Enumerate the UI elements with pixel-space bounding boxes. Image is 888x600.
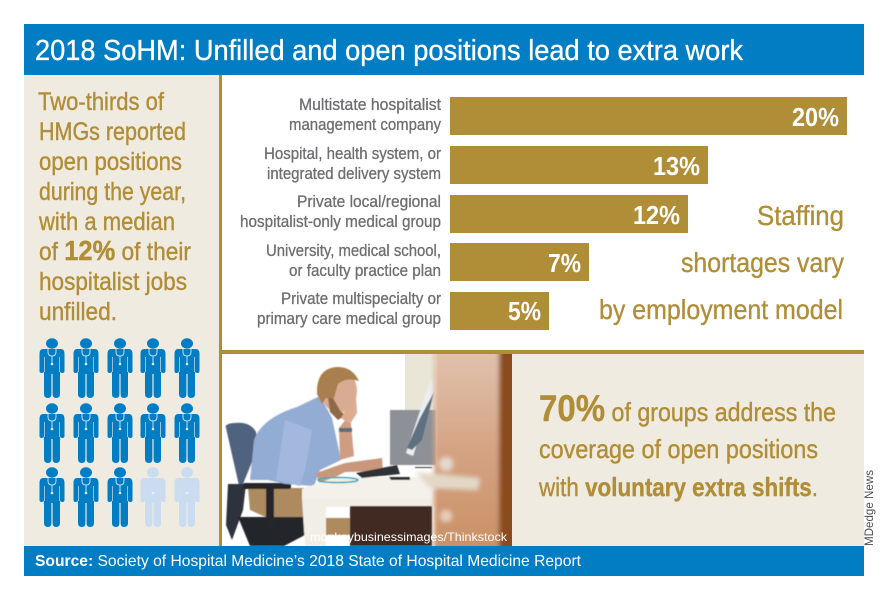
bar values: 13% [653,151,700,181]
chart caption [599,200,844,325]
shirt [250,396,341,486]
bar values: 12% [633,200,680,230]
trousers [248,488,306,522]
sidebar text: unfilled. [39,298,117,326]
chart caption: shortages vary [681,247,844,278]
category labels [240,96,442,328]
sidebar text: with a median [38,208,175,236]
monitor back [390,410,436,465]
desk [302,477,436,500]
gold vertical divider [219,75,222,546]
chair seat and arm [238,517,305,546]
sidebar text [38,88,191,326]
sidebar text: of 12% of their [39,235,191,266]
callout text: 70% of groups address the [539,388,836,429]
sidebar text: hospitalist jobs [39,268,187,296]
chair back [226,423,258,490]
panel: left sidebar [24,75,219,546]
category labels: primary care medical group [257,310,441,328]
sidebar text: open positions [39,148,182,176]
chart caption: by employment model [599,294,843,325]
panel: callout [512,354,864,546]
category labels: hospitalist-only medical group [240,213,441,231]
door [415,354,506,546]
footer source bar [24,546,864,576]
category labels: Multistate hospitalist [299,96,441,114]
side credit: MDedge News [862,470,876,546]
forearm on keyboard [316,458,383,485]
category labels: Hospital, health system, or [264,145,441,163]
title: 2018 SoHM: Unfilled and open positions lead to extra work [35,35,743,67]
category labels: or faculty practice plan [289,262,441,280]
header banner [24,24,864,75]
callout text [538,388,836,502]
callout text: with voluntary extra shifts. [538,472,818,502]
sidebar text: HMGs reported [39,118,186,146]
stethoscope [318,478,358,482]
raised arm [339,414,354,460]
sidebar text: during the year, [39,178,186,206]
bar values: 7% [548,248,581,278]
icon grid: 13 of 15 hospitalists filled [40,338,200,527]
chart caption: Staffing [757,200,844,231]
bar values: 20% [792,102,839,132]
category labels: integrated delivery system [267,165,441,183]
category labels: management company [289,116,442,134]
gold horizontal divider [222,350,864,354]
bar values [508,102,839,326]
callout text: coverage of open positions [539,434,818,464]
category labels: Private local/regional [297,193,441,211]
keyboard [356,465,400,478]
source text: Source: Society of Hospital Medicine’s 2018 State of Hospital Medicine Report [35,553,582,570]
category labels: Private multispecialty or [281,290,441,308]
photo: tired doctor at a desk [222,345,513,555]
category labels: University, medical school, [266,242,441,260]
bar values: 5% [508,296,541,326]
sidebar text: Two-thirds of [38,88,164,116]
photo credit: monkeybusinessimages/Thinkstock [310,530,508,544]
bars [450,97,847,330]
head [323,379,358,413]
panel: bar chart [240,96,847,330]
